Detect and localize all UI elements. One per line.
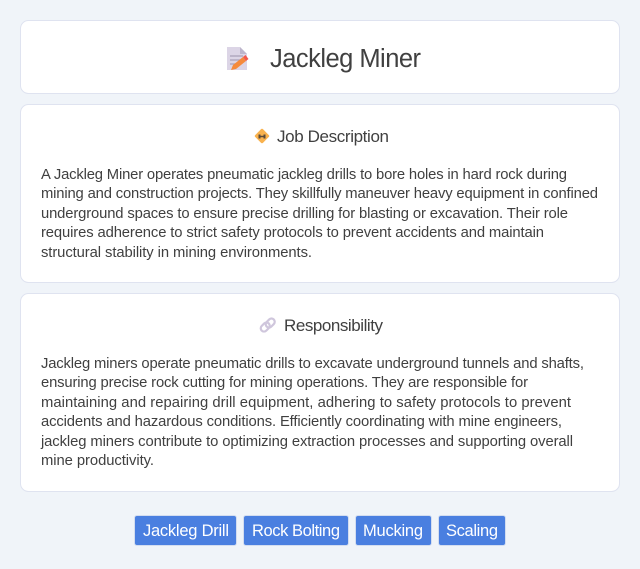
- tag: jackleg drill: Jackleg Drill: [143, 522, 229, 540]
- text block: job description: A Jackleg Miner operates pneumatic jackleg drills to bore holes in hard rock during: [41, 167, 567, 183]
- text block: job description: [41, 167, 598, 261]
- tag: mucking: Mucking: [363, 522, 423, 540]
- text block: responsibility: mine productivity.: [41, 453, 154, 469]
- text block: job description: requires adherence to strict safety protocols to prevent accidents and maintain: [41, 225, 544, 241]
- text block: responsibility: [40, 356, 584, 469]
- tag: rock bolting: [244, 516, 348, 546]
- heading: responsibility: Responsibility: [284, 316, 384, 335]
- text block: responsibility: Jackleg miners operate pneumatic drills to excavate underground tunnels and shafts,: [41, 356, 584, 372]
- text block: job description: underground spaces to ensure precise drilling for blasting or excavation. Their role: [41, 206, 568, 222]
- text block: job description: structural stability in mining environments.: [41, 245, 312, 261]
- icon: construction diamond: [254, 128, 270, 144]
- tag: rock bolting: Rock Bolting: [252, 522, 340, 540]
- icon: link: [259, 317, 276, 333]
- tag: scaling: [438, 516, 506, 546]
- heading: job description: Job Description: [277, 127, 389, 146]
- text block: responsibility: accidents and hazardous conditions. Efficiently coordinating with mine engineers,: [41, 414, 562, 430]
- text block: responsibility: ensuring precise rock cutting for mining operations. They are responsible for: [41, 375, 528, 391]
- panel: title: [20, 20, 620, 94]
- tag: jackleg drill: [134, 516, 236, 546]
- text block: job description: mining and construction projects. They skillfully maneuver heavy equipment in confined: [41, 186, 598, 202]
- text block: responsibility: maintaining and repairing drill equipment, adhering to safety protocols to prevent: [41, 395, 571, 411]
- text block: responsibility: jackleg miners contribute to optimizing extraction processes and supporting overall: [40, 434, 573, 450]
- tag: scaling: Scaling: [446, 522, 498, 540]
- tags: [134, 516, 506, 546]
- icon: document with pencil: [227, 47, 248, 70]
- tag: mucking: [356, 516, 432, 546]
- panel: responsibility: [20, 294, 620, 492]
- panel: job description: [20, 104, 620, 282]
- title text: Jackleg Miner: [270, 45, 422, 73]
